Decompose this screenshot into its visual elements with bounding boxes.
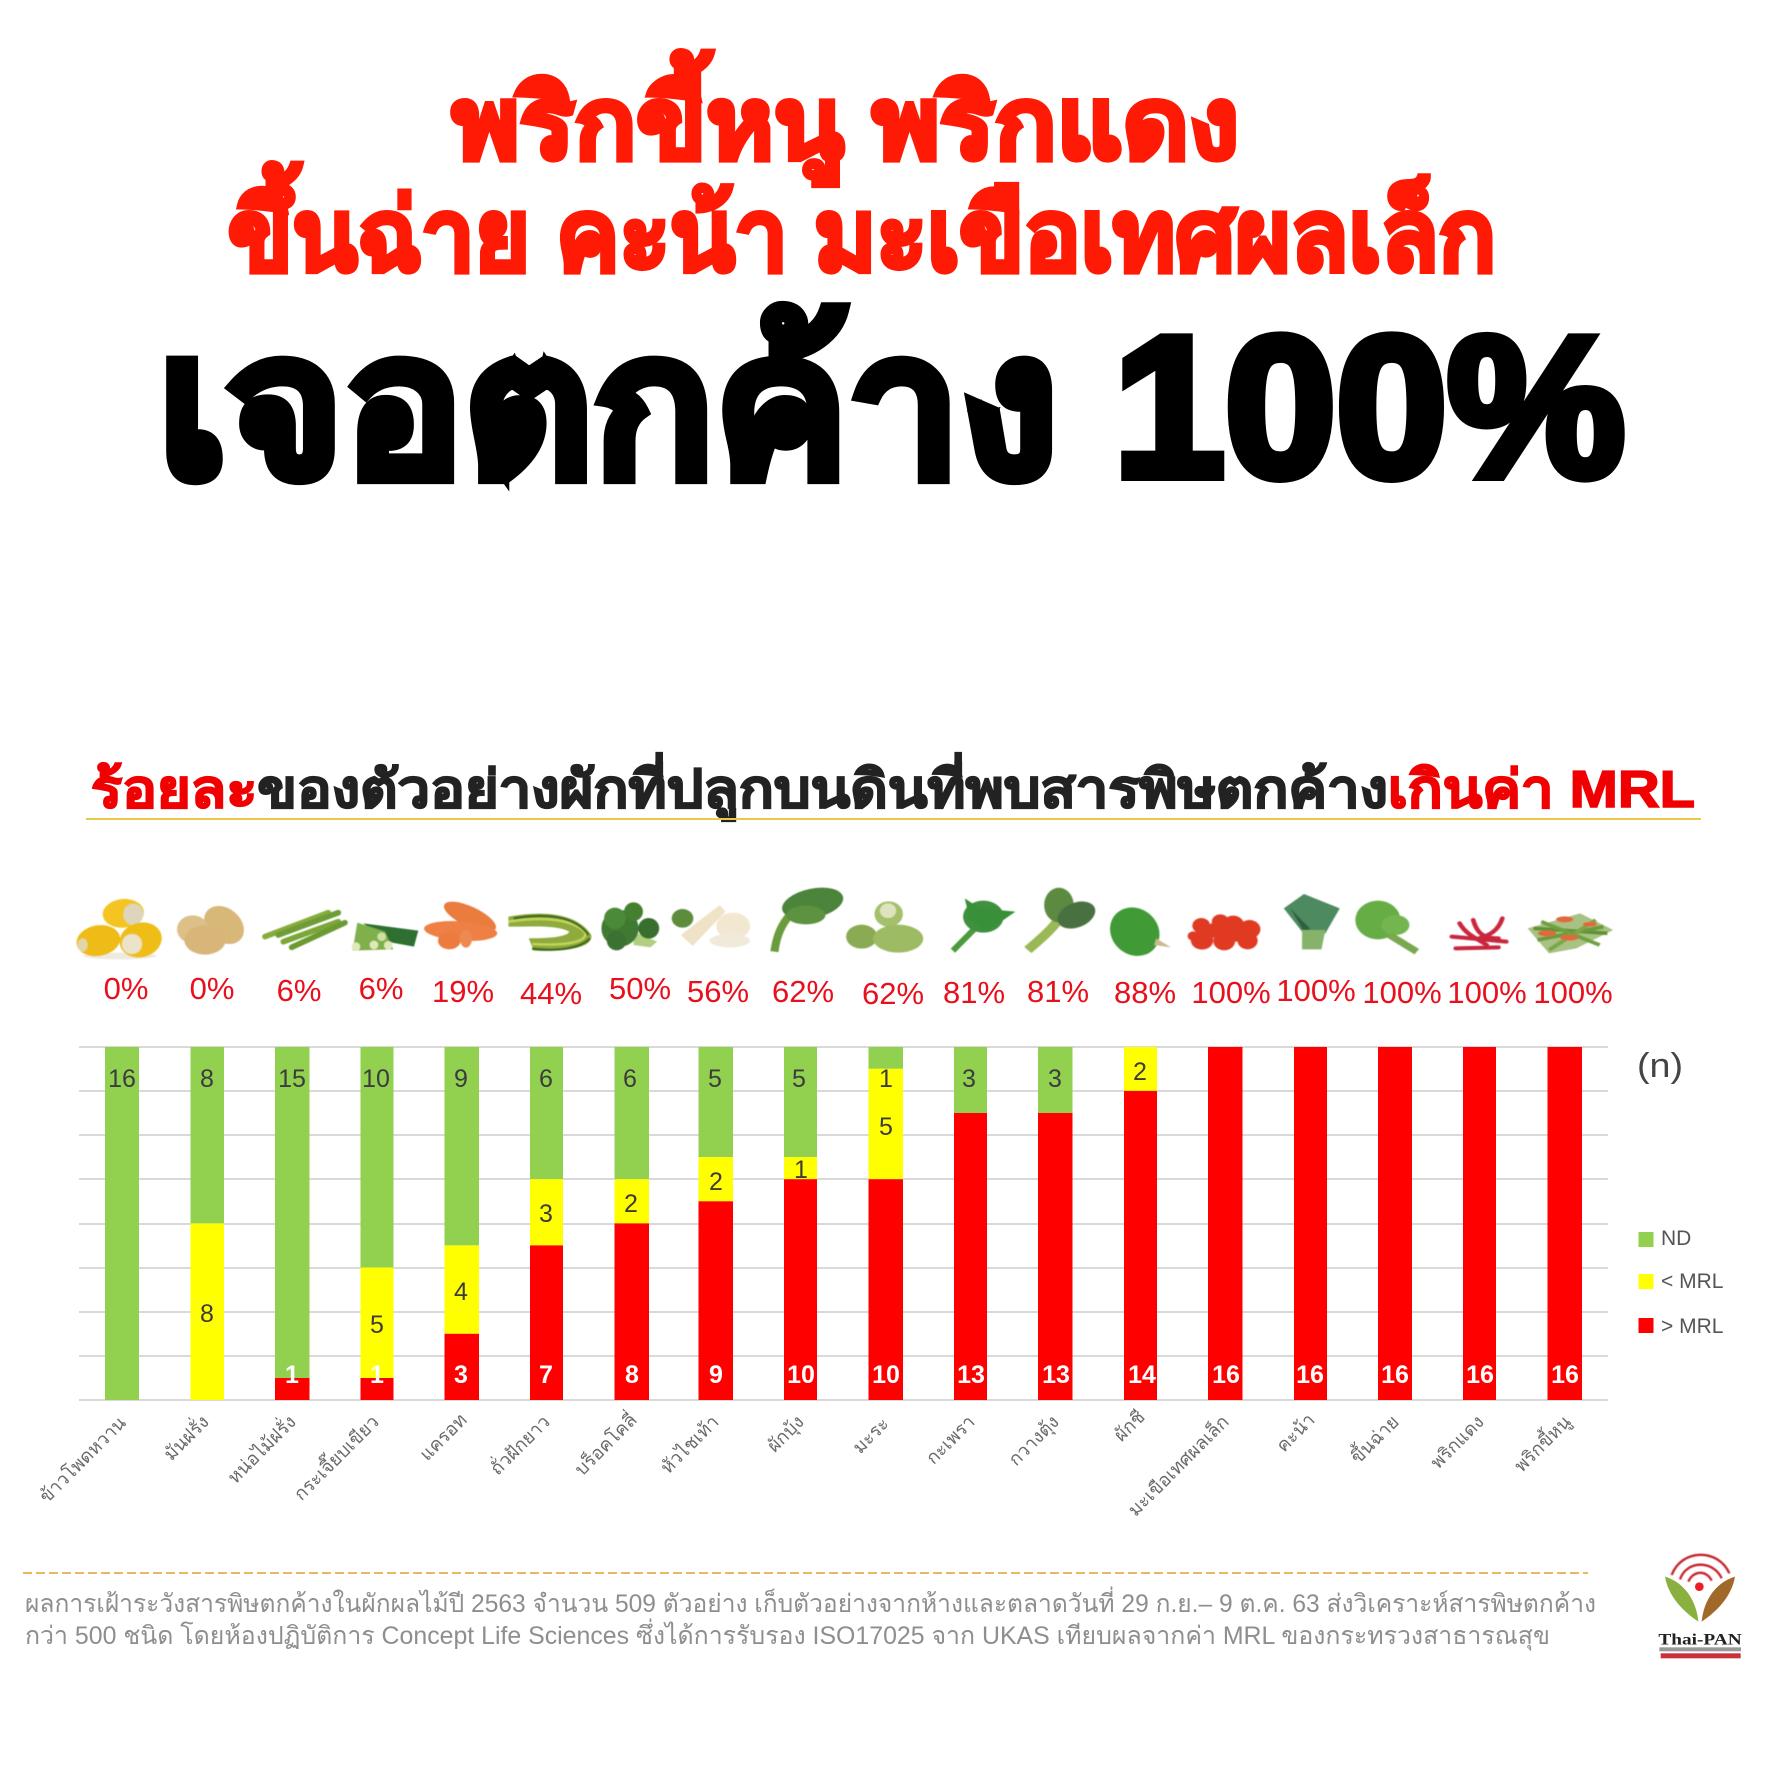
category axis labels: กวางตุ้ง [1004,1411,1064,1471]
bar value labels: 2 [624,1190,638,1218]
bar value labels: 14 [1128,1361,1156,1389]
bar value labels: 7 [539,1361,553,1389]
bar value labels: 5 [370,1311,384,1339]
bar value labels: 16 [1551,1361,1579,1389]
bar value labels: 16 [1296,1361,1324,1389]
headline line 3: เจอตกค้าง 100% [158,296,1625,519]
bar value labels: 5 [708,1065,722,1093]
category axis labels: คะน้า [1272,1409,1319,1456]
bar value labels: 3 [1048,1065,1062,1093]
axis unit label: (n) [1637,1047,1683,1085]
bar value labels: 5 [879,1113,893,1141]
category axis labels: มะระ [848,1413,893,1458]
percentage labels: 81% [1027,974,1089,1009]
percentage labels: 100% [1276,973,1356,1008]
stacked bar chart [79,1046,1608,1401]
category axis labels: ข้าวโพดหวาน [35,1412,130,1507]
category axis labels: หัวไชเท้า [656,1411,723,1478]
bar value labels: 4 [454,1278,468,1306]
bar value labels: 3 [962,1065,976,1093]
category axis labels: มะเขือเทศผลเล็ก [1122,1410,1233,1520]
legend [1638,1227,1723,1338]
percentage labels: 50% [609,971,671,1006]
bar value labels: 10 [362,1065,390,1093]
legend: ND [1661,1227,1691,1250]
percentage labels: 81% [943,975,1005,1010]
bar value labels: 6 [623,1065,637,1093]
bar value labels: 16 [1381,1361,1409,1389]
category axis labels: ผักบุ้ง [763,1411,809,1458]
category axis labels: กระเจี๊ยบเขียว [287,1409,383,1504]
bar value labels: 16 [108,1065,136,1093]
chart heading: ร้อยละ ของตัวอย่างผักที่ปลูกบนดินที่พบสารพิษตกค้าง เกินค่า MRL [91,753,1695,822]
percentage labels: 88% [1114,975,1176,1010]
logo: Thai-PAN: Thai-PAN [1658,1632,1742,1649]
headline line 1: พริกขี้หนู พริกแดง [452,50,1239,186]
title: main headline [158,50,1625,519]
percentage labels: 44% [520,976,582,1011]
percentage labels: 0% [104,971,148,1006]
percentage labels: 100% [1447,975,1527,1010]
category axis labels: พริกแดง [1426,1411,1488,1473]
percentage labels: 56% [687,974,749,1009]
bar value labels: 2 [1133,1058,1147,1086]
percentage labels: 100% [1191,975,1271,1010]
icons: kwangtung, coriander, tomato, kale, celery, red chili, green chili [1028,888,1613,962]
percentage labels: 0% [190,971,234,1006]
bar value labels: 8 [200,1065,214,1093]
bar value labels: 1 [879,1065,893,1093]
icons: long bean, broccoli, white radish, morning glory, bitter gourd, basil [508,883,1015,953]
bar value labels: 3 [539,1200,553,1228]
percentage labels: 62% [772,974,834,1009]
category axis labels: ถั่วฝักยาว [484,1410,554,1479]
bars [105,1047,1582,1400]
bar value labels: 3 [454,1361,468,1389]
bar value labels: 9 [709,1361,723,1389]
percentage labels: 6% [277,973,321,1008]
footer source note: กว่า 500 ชนิด โดยห้องปฏิบัติการ Concept Life Sciences ซึ่งได้การรับรอง ISO17025 จาก UKAS เทียบผลจากค่า MRL ของกระทรวงสาธารณสุข [25,1618,1550,1651]
bar value labels: 8 [625,1361,639,1389]
bar value labels: 16 [1466,1361,1494,1389]
icons: corn, potato, asparagus, okra, carrot [74,896,500,962]
bar value labels: 9 [454,1065,468,1093]
bar value labels: 15 [278,1065,306,1093]
percentage labels: 100% [1362,975,1442,1010]
bar value labels: 6 [539,1065,553,1093]
bar value labels: 1 [285,1361,299,1389]
bar value labels [108,1058,1579,1389]
category axis labels: ผักชี [1110,1406,1149,1445]
bar value labels: 10 [787,1361,815,1389]
bar value labels: 8 [200,1300,214,1328]
legend: > MRL [1661,1315,1723,1338]
bar value labels: 16 [1212,1361,1240,1389]
footer source note: ผลการเฝ้าระวังสารพิษตกค้างในผักผลไม้ปี 2563 จำนวน 509 ตัวอย่าง เก็บตัวอย่างจากห้างและตลาดวันที่ 29 ก.ย.– 9 ต.ค. 63 ส่งวิเคราะห์สารพิษตกค้าง [25,1586,1596,1618]
percentage labels: 62% [862,976,924,1011]
category axis labels: ขึ้นฉ่าย [1344,1409,1403,1468]
bar value labels: 5 [792,1065,806,1093]
percentage labels [104,971,1613,1011]
category axis labels: บร็อคโคลี่ [569,1408,641,1480]
category axis labels [35,1406,1576,1520]
category axis labels: กะเพรา [922,1411,979,1468]
category axis labels: แครอท [415,1409,471,1465]
bar value labels: 1 [794,1156,808,1184]
bar value labels: 10 [872,1361,900,1389]
bar value labels: 1 [370,1361,384,1389]
category axis labels: มันฝรั่ง [158,1410,213,1464]
category axis labels: พริกขี้หนู [1508,1409,1576,1477]
headline line 2: ขึ้นฉ่าย คะน้า มะเขือเทศผลเล็ก [228,162,1496,292]
percentage labels: 100% [1533,975,1613,1010]
legend: < MRL [1661,1270,1723,1293]
bar value labels: 13 [1042,1361,1070,1389]
category axis labels: หน่อไม้ฝรั่ง [222,1410,300,1488]
percentage labels: 6% [359,971,403,1006]
bar value labels: 2 [709,1168,723,1196]
logo: Thai-PAN [1658,1555,1742,1658]
vegetable icons row [74,883,1613,962]
footer source note [23,1573,1596,1651]
percentage labels: 19% [432,974,494,1009]
bar value labels: 13 [957,1361,985,1389]
